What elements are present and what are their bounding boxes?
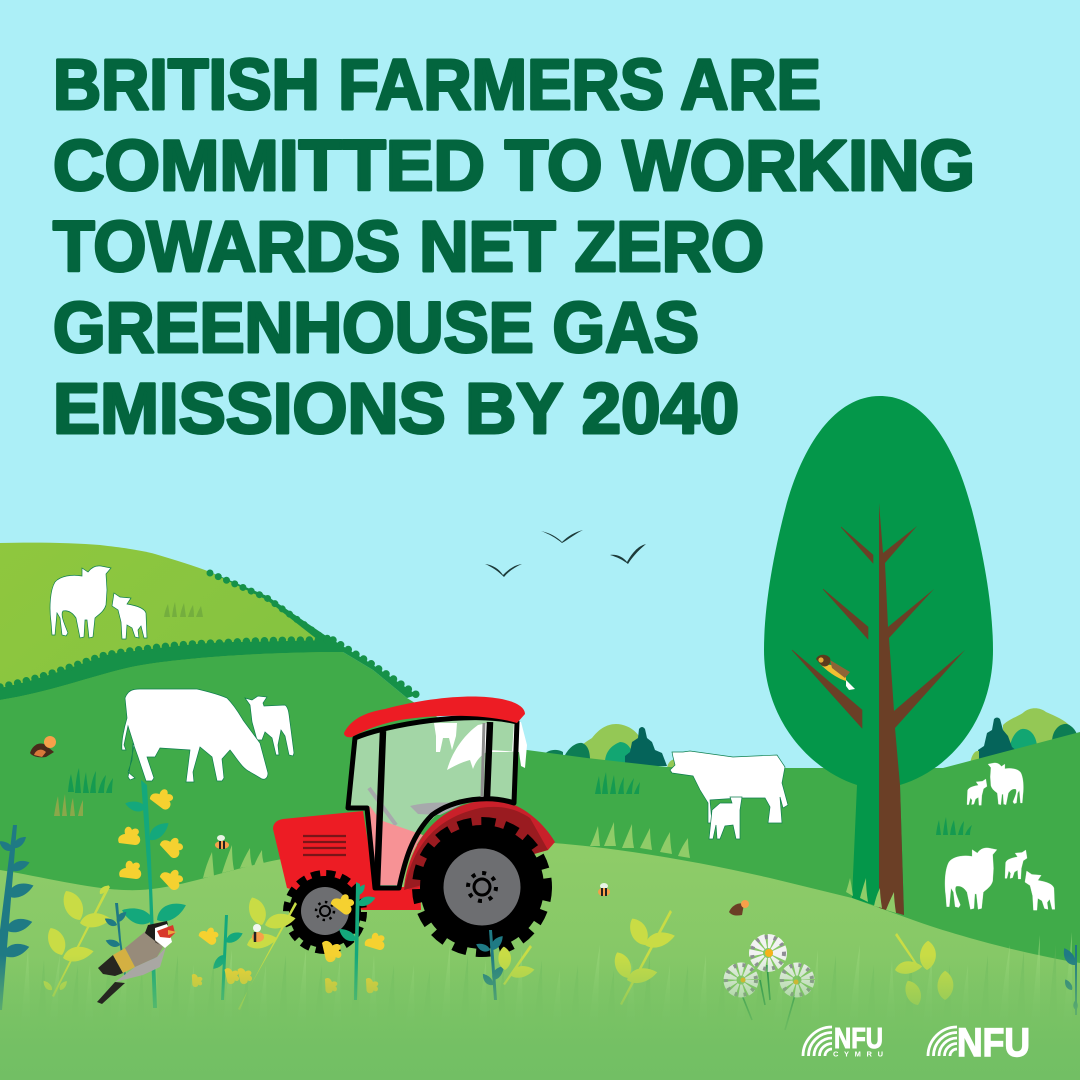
bee centre xyxy=(598,883,610,896)
cow and calf centre right xyxy=(670,751,788,839)
cab seat xyxy=(410,802,465,815)
butterfly right xyxy=(729,900,749,916)
sheep and lamb top left xyxy=(50,566,147,639)
tree trunk and branches xyxy=(879,503,965,915)
goldfinch bird xyxy=(97,921,177,1004)
cab frame xyxy=(348,718,517,888)
grass tufts xyxy=(54,602,972,913)
scalloped hedge on middle hill xyxy=(0,640,417,700)
bee low left xyxy=(252,924,264,942)
tree xyxy=(764,396,993,915)
daisies xyxy=(726,937,812,1030)
plant: lime left xyxy=(41,884,112,997)
bird on branch xyxy=(816,655,855,690)
tractor hood xyxy=(273,811,421,910)
title: EMISSIONS BY 2040 xyxy=(53,370,739,449)
background bushes right xyxy=(970,708,1078,765)
teal sprig near bird xyxy=(103,903,128,975)
title: COMMITTED TO WORKING xyxy=(53,127,975,206)
foreground meadow xyxy=(0,843,1080,1080)
logo: NFU: NFU xyxy=(957,1021,1030,1065)
plant: tall teal with yellow flowers xyxy=(118,780,189,1008)
top-left lime hill xyxy=(0,543,345,720)
tree canopy xyxy=(764,396,993,915)
lower meadow plants xyxy=(103,882,1078,1015)
background bushes centre xyxy=(543,724,677,770)
lime sprig centre xyxy=(612,910,677,1005)
tractor xyxy=(273,696,555,952)
middle green hill xyxy=(0,652,1080,1000)
lime sprig under rear wheel xyxy=(497,945,535,985)
front wheel xyxy=(287,874,363,950)
tractor roof xyxy=(344,696,525,737)
title: GREENHOUSE GAS xyxy=(53,289,699,368)
foreground grass blades xyxy=(20,932,1072,1035)
rear fender xyxy=(404,800,555,890)
plant: teal left edge xyxy=(0,825,35,1010)
rear wheel xyxy=(417,822,547,952)
tractor cab glass xyxy=(348,718,517,888)
bottom grass fade band xyxy=(0,955,1080,1080)
logo: NFU Cymru: CYMRU xyxy=(833,1050,883,1058)
logo: NFU xyxy=(928,1021,1030,1065)
cows seen through glass xyxy=(434,722,527,770)
cab lower pink panel xyxy=(368,806,423,885)
teal sprig by tractor xyxy=(336,882,377,1000)
logo: NFU Cymru: NFU xyxy=(834,1023,883,1055)
logo: NFU Cymru xyxy=(803,1023,883,1058)
flying birds xyxy=(485,530,646,577)
teal sprig centre-left xyxy=(210,915,244,1000)
teal sprig right edge xyxy=(1060,945,1078,1015)
cow and calf left xyxy=(122,689,294,782)
butterfly left xyxy=(30,736,56,757)
sheep right group xyxy=(945,763,1055,910)
bee left xyxy=(215,835,229,849)
lime sprig centre-left xyxy=(238,895,297,1010)
hood vents xyxy=(303,836,346,855)
title: TOWARDS NET ZERO xyxy=(53,208,764,287)
title: BRITISH FARMERS ARE xyxy=(53,46,821,125)
title xyxy=(53,46,975,449)
yellow flowers by tractor xyxy=(320,890,386,994)
lime plant right xyxy=(894,933,955,1007)
scalloped hedge on lime hill xyxy=(210,572,335,642)
yellow flowers centre-left xyxy=(191,924,254,988)
teal sprig under rear wheel xyxy=(475,930,507,1000)
